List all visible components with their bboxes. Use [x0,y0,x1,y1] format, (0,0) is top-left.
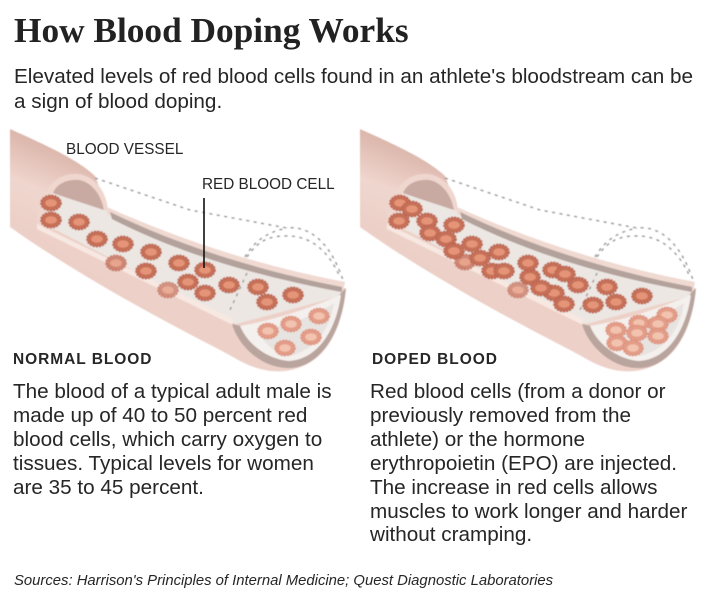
text: normal blood [13,380,332,499]
doped blood vessel illustration [360,129,696,371]
text: normal blood: tissues. Typical levels for women [13,452,314,475]
sources: Sources: Harrison's Principles of Internal Medicine; Quest Diagnostic Laboratories [14,573,553,589]
intro text [14,65,693,112]
label: red blood cell: RED BLOOD CELL [202,176,335,193]
text: doped blood: The increase in red cells allows [370,476,657,499]
label line: red blood cell [203,198,205,268]
text: normal blood: are 35 to 45 percent. [13,476,204,499]
intro text: a sign of blood doping. [14,90,222,112]
intro text: Elevated levels of red blood cells found in an athlete's bloodstream can be [14,65,693,88]
text: normal blood: blood cells, which carry oxygen to [13,428,322,451]
text: doped blood: Red blood cells (from a donor or [370,380,666,403]
normal blood vessel illustration [10,129,346,371]
text: normal blood: made up of 40 to 50 percent red [13,404,307,427]
title: How Blood Doping Works [14,11,409,50]
text: doped blood: without cramping. [370,523,532,546]
text: doped blood: erythropoietin (EPO) are injected. [370,452,677,475]
text: doped blood: muscles to work longer and harder [370,500,687,523]
label: blood vessel: BLOOD VESSEL [66,141,183,158]
heading: doped blood: DOPED BLOOD [372,351,498,368]
text: doped blood: athlete) or the hormone [370,428,585,451]
text: normal blood: The blood of a typical adult male is [13,380,332,403]
heading: normal blood: NORMAL BLOOD [13,351,152,368]
text: doped blood [370,380,688,546]
text: doped blood: previously removed from the [370,404,631,427]
